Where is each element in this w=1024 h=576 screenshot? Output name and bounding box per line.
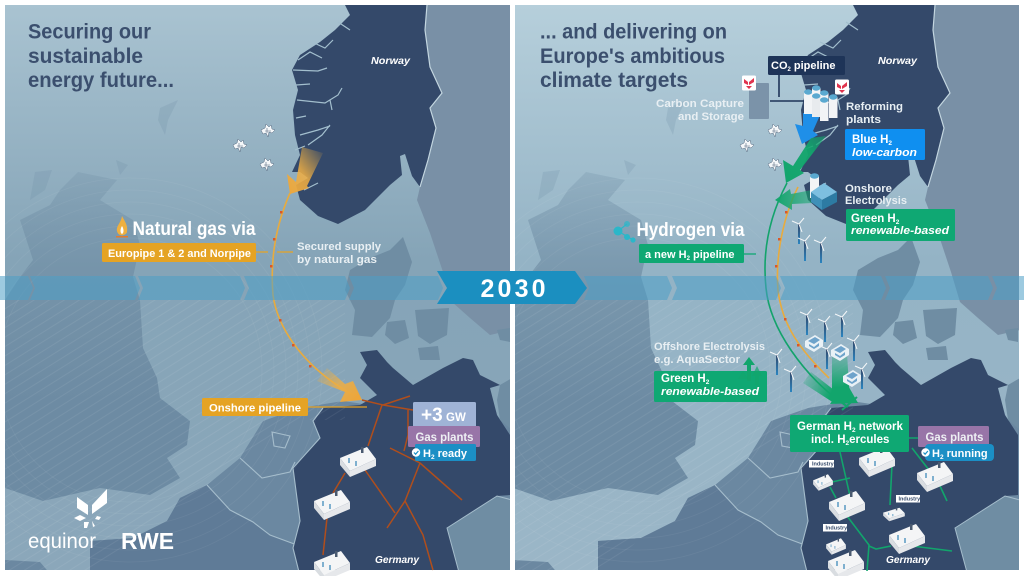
label: green H2 offshore: renewable-based	[661, 386, 759, 398]
chart: natural gas pipeline curve	[270, 193, 353, 395]
icon: onshore electrolysis	[810, 173, 837, 210]
text: onshore electrolysis: Electrolysis	[845, 195, 907, 207]
label: green H2 onshore	[846, 209, 955, 241]
heading right: climate targets	[540, 69, 688, 92]
arrow: onshore green	[775, 189, 812, 210]
label: onshore pipeline: Onshore pipeline	[209, 402, 301, 414]
label: new H2 pipeline: 2	[687, 256, 691, 262]
icons: gas platforms	[233, 124, 275, 171]
text: offshore electrolysis: Offshore Electrolysis	[654, 341, 765, 353]
label: German H2 network: ercules	[849, 434, 889, 446]
icon: hydrogen molecule	[614, 221, 636, 243]
label: blue H2: Blue H	[852, 134, 888, 146]
heading right: ... and delivering on	[540, 20, 727, 44]
icons: red tags	[742, 76, 849, 94]
label: Germany: Germany	[886, 554, 931, 566]
label: German H2 network	[790, 415, 909, 452]
label: German H2 network: incl. H	[811, 434, 846, 446]
label: German H2 network: network	[856, 421, 903, 433]
heading left: energy future...	[28, 69, 174, 92]
arrow: gas into Germany	[317, 368, 362, 402]
text: carbon capture and storage: and Storage	[678, 111, 744, 123]
text: secured supply: Secured supply	[297, 241, 382, 253]
label: industry tags: Industry	[826, 526, 848, 532]
callout: gas plants H2 running: H	[932, 448, 940, 460]
logo: equinor: equinor	[28, 530, 96, 553]
label: Norway: Norway	[878, 55, 918, 67]
label: CO2 pipeline	[768, 56, 845, 75]
panel: right map, hydrogen 2030	[515, 5, 1019, 576]
label: German H2 network: German H	[797, 421, 852, 433]
heading left	[28, 20, 174, 92]
label: German H2 network: 2	[846, 440, 850, 447]
label: Europipe: Europipe 1 & 2 and Norpipe	[108, 248, 251, 260]
label: industry tags	[809, 460, 921, 532]
logo: equinor	[28, 489, 107, 553]
map geography right	[515, 5, 1019, 570]
block: carbon capture storage	[749, 83, 769, 119]
label: green H2 onshore: renewable-based	[851, 225, 949, 237]
label: CO2 pipeline: pipeline	[791, 60, 835, 72]
text: carbon capture and storage: Carbon Capture	[656, 98, 744, 110]
text: reforming plants: Reforming	[846, 101, 903, 113]
label: green H2 offshore	[654, 371, 767, 402]
logo: RWE: RWE	[121, 528, 174, 554]
heading right: Europe's ambitious	[540, 45, 725, 68]
callout: +3 GW gas plants H2 ready	[408, 402, 480, 461]
text: secured supply	[297, 241, 382, 266]
callout: +3 GW gas plants H2 ready: Gas plants	[416, 432, 474, 444]
label: blue H2: 2	[888, 140, 892, 147]
timeline band	[0, 271, 1024, 304]
text: reforming plants: plants	[846, 114, 881, 126]
icons: gas plants	[314, 447, 376, 576]
callout: gas plants H2 running: 2	[940, 454, 944, 461]
text: reforming plants	[846, 101, 903, 126]
icons: wind turbines	[770, 218, 867, 392]
label: industry tags: Industry	[898, 496, 921, 502]
label: Germany: Germany	[375, 554, 420, 566]
chart: German hydrogen network	[830, 438, 952, 571]
icons: reforming cylinders	[804, 85, 838, 121]
label: green H2 offshore: 2	[706, 379, 710, 386]
label: German H2 network: 2	[852, 427, 856, 434]
icons: gas plants and industry	[813, 447, 953, 576]
label: green H2 onshore: 2	[896, 219, 900, 226]
text: secured supply: by natural gas	[297, 254, 377, 266]
label: onshore pipeline	[202, 398, 367, 416]
callout: +3 GW gas plants H2 ready: H	[423, 448, 431, 460]
text: onshore electrolysis	[845, 183, 907, 207]
callout: gas plants H2 running: running	[944, 448, 988, 460]
chart: green hydrogen curve	[765, 183, 838, 400]
label: Europipe	[102, 243, 256, 262]
label: new H2 pipeline: pipeline	[690, 249, 735, 261]
heading left: Securing our	[28, 20, 151, 44]
label: CO2 pipeline: 2	[788, 67, 792, 73]
text: offshore electrolysis: e.g. AquaSector	[654, 354, 741, 366]
text: carbon capture and storage	[656, 98, 744, 123]
map geography left	[0, 5, 520, 576]
text: onshore electrolysis: Onshore	[845, 183, 892, 195]
label: new H2 pipeline: a new H	[645, 249, 687, 261]
label: new H2 pipeline	[639, 244, 756, 263]
arrows: offshore hydrogen fan	[803, 353, 858, 410]
callout: gas plants H2 running	[918, 426, 994, 461]
connectors to pipeline	[256, 251, 293, 253]
chevron: 2030	[437, 271, 587, 304]
heading right	[540, 20, 727, 92]
pipeline: CO2 lines	[770, 75, 804, 101]
arrow: blue hydrogen	[795, 113, 821, 144]
label: green H2 onshore: Green H	[851, 213, 896, 225]
label: green H2 offshore: Green H	[661, 373, 706, 385]
arrow: gas from Norway	[287, 147, 323, 194]
heading: natural gas via: Natural gas via	[132, 219, 256, 240]
chart: orange natural gas curve	[775, 187, 829, 378]
heading left: sustainable	[28, 45, 143, 68]
label: blue H2: low-carbon	[852, 147, 917, 159]
panel: left map, natural gas today	[0, 5, 520, 576]
label: industry tags: Industry	[812, 462, 835, 468]
icons: platforms	[740, 124, 782, 171]
callout: +3 GW gas plants H2 ready: ready	[435, 448, 468, 460]
callout: gas plants H2 running: Gas plants	[926, 432, 984, 444]
label: blue H2	[845, 129, 925, 160]
chart: German gas network	[323, 396, 462, 570]
heading: hydrogen via: Hydrogen via	[636, 220, 745, 241]
icon: green up arrows	[738, 357, 762, 385]
text: offshore electrolysis	[654, 341, 765, 366]
callout: +3 GW gas plants H2 ready: GW	[446, 412, 466, 424]
icon: flame	[116, 216, 128, 238]
label: CO2 pipeline: CO	[771, 60, 788, 72]
label: Norway: Norway	[371, 55, 411, 67]
label: 2030: 2030	[480, 275, 546, 303]
arrow: green from blue	[783, 136, 826, 183]
callout: +3 GW gas plants H2 ready: 2	[431, 454, 435, 461]
icons: offshore electrolysis platforms	[805, 335, 861, 387]
callout: +3 GW gas plants H2 ready: +3	[421, 405, 443, 426]
